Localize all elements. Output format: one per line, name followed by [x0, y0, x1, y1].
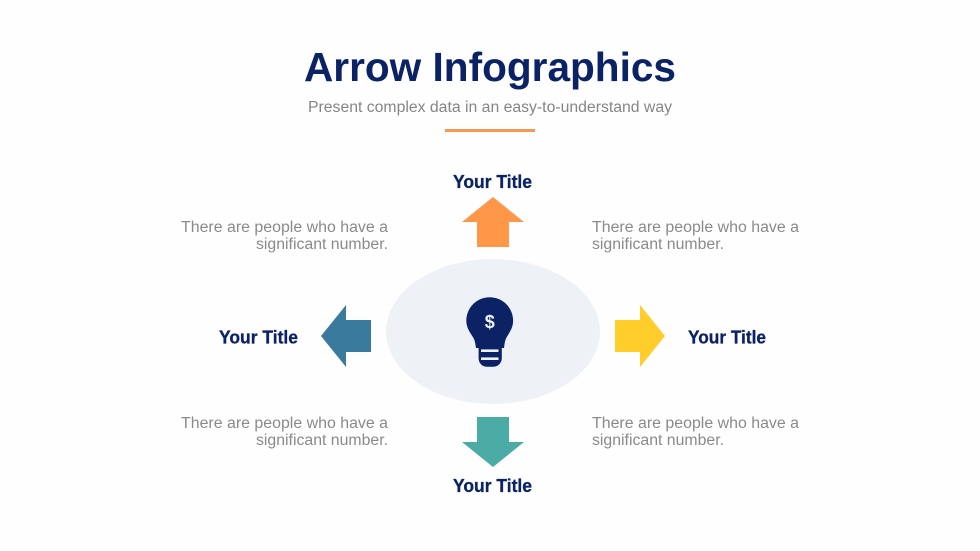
title underline — [445, 129, 535, 132]
heading: right: Your Title — [688, 328, 766, 348]
text block: bottom right: significant number. — [592, 432, 724, 449]
center ellipse — [386, 259, 600, 404]
arrow: right — [615, 305, 665, 367]
arrow: left — [321, 305, 371, 367]
text block: bottom right — [592, 415, 799, 449]
text block: top right — [592, 219, 799, 253]
heading: top: Your Title — [453, 172, 532, 192]
text block: top right: significant number. — [592, 236, 724, 253]
arrow: down — [462, 417, 524, 467]
icon: light bulb with dollar sign: $ — [485, 312, 495, 332]
heading: left: Your Title — [219, 328, 298, 348]
text block: top right: There are people who have a — [592, 219, 799, 236]
text block: bottom right: There are people who have a — [592, 415, 799, 432]
text block: bottom left: significant number. — [256, 432, 388, 449]
subtitle: Present complex data in an easy-to-understand way — [308, 99, 672, 116]
heading: bottom: Your Title — [453, 476, 532, 496]
arrow: up — [462, 197, 524, 247]
text block: top left: significant number. — [256, 236, 388, 253]
text block: top left — [181, 219, 388, 253]
icon: light bulb with dollar sign — [466, 297, 513, 367]
text block: bottom left: There are people who have a — [181, 415, 388, 432]
text block: bottom left — [181, 415, 388, 449]
text block: top left: There are people who have a — [181, 219, 388, 236]
title: Arrow Infographics — [304, 44, 676, 90]
